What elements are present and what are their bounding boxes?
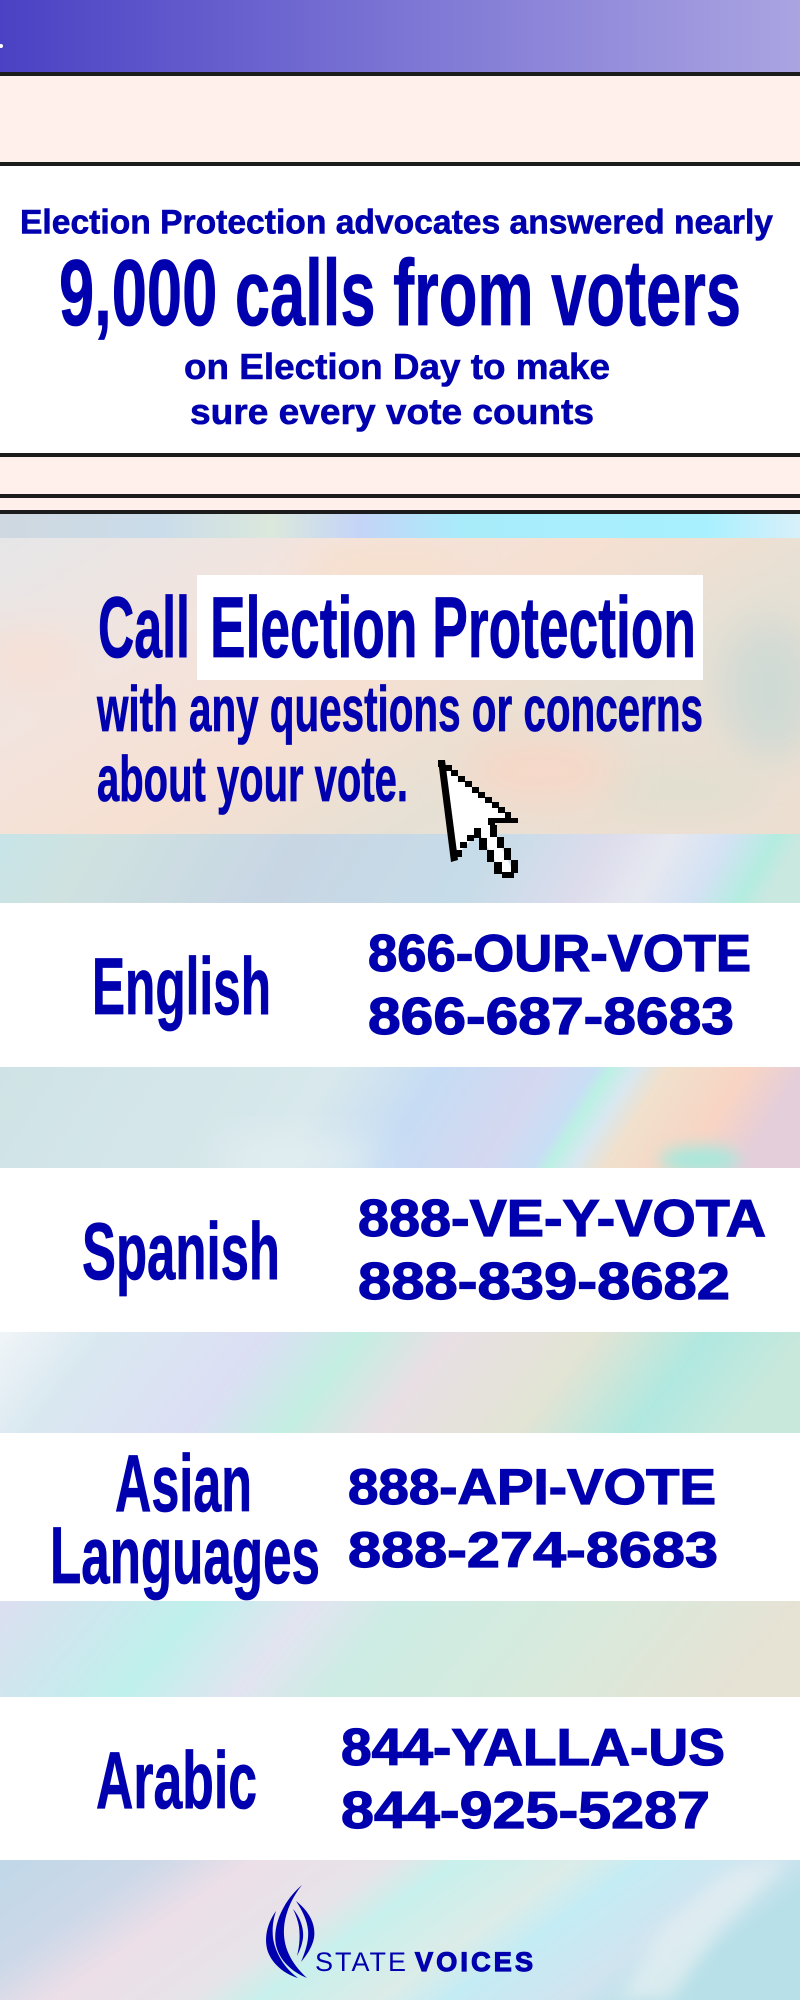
language label line one: Asian — [115, 1439, 252, 1529]
phone word: 844-YALLA-US — [341, 1719, 725, 1777]
phone number: 866-687-8683 — [368, 988, 734, 1046]
phone number: 888-839-8682 — [358, 1253, 730, 1311]
language label line two: Languages — [50, 1511, 320, 1601]
wordmark — [315, 1947, 533, 1977]
wordmark: VOICES — [415, 1947, 533, 1977]
highlight box — [197, 575, 703, 680]
panel: Arabic hotline — [0, 1697, 800, 1860]
phone word: 888-API-VOTE — [348, 1459, 716, 1515]
holographic strip above call panel — [0, 514, 800, 538]
subheading line two: about your vote. — [97, 743, 408, 815]
phone number: 888-274-8683 — [348, 1522, 718, 1578]
footer holographic band — [0, 1860, 800, 2000]
panel: call election protection — [0, 538, 800, 834]
language label: English — [92, 942, 271, 1032]
cream banner — [0, 72, 800, 166]
panel: Spanish hotline — [0, 1168, 800, 1332]
panel: English hotline — [0, 903, 800, 1067]
top gradient band — [0, 0, 800, 72]
wordmark: STATE — [315, 1947, 406, 1977]
intro line: Election Protection advocates answered nearly — [20, 204, 773, 242]
language label: Arabic — [96, 1736, 257, 1826]
panel: calls statistic — [0, 166, 800, 453]
phone word: 888-VE-Y-VOTA — [358, 1190, 766, 1248]
phone word: 866-OUR-VOTE — [368, 925, 751, 983]
icon: leaf crescents — [266, 1885, 314, 1978]
holographic strip — [0, 1601, 800, 1697]
holographic strip — [0, 1332, 800, 1433]
holographic strip below call panel — [0, 834, 800, 903]
heading — [98, 580, 696, 676]
icon: pixel cursor arrow — [438, 760, 518, 878]
holographic strip — [0, 1067, 800, 1168]
phone number: 844-925-5287 — [341, 1782, 710, 1840]
heading: Call — [98, 580, 190, 676]
panel: Asian languages hotline — [0, 1433, 800, 1601]
cream divider band — [0, 453, 800, 514]
language label: Spanish — [82, 1207, 280, 1297]
closing line two: sure every vote counts — [190, 391, 594, 432]
closing line one: on Election Day to make — [184, 346, 610, 387]
logo: State Voices — [266, 1885, 533, 1978]
